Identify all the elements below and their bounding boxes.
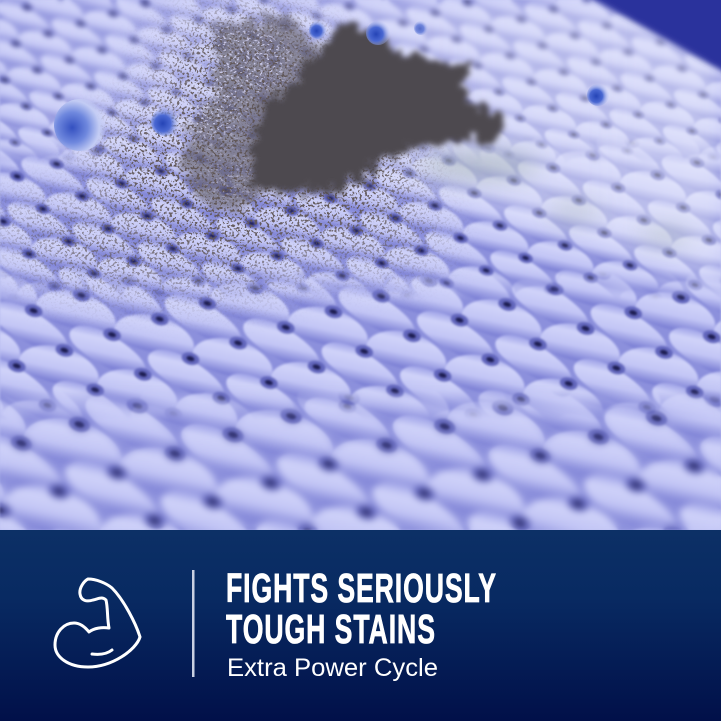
knit texture (0, 0, 721, 530)
droplet right (587, 84, 609, 106)
droplet top centre (366, 21, 390, 45)
stain and droplets overlay (0, 0, 721, 318)
subheading: Extra Power Cycle (227, 654, 438, 682)
droplet small left (151, 108, 179, 136)
divider (192, 570, 194, 677)
heading: FIGHTS SERIOUSLY (226, 566, 496, 611)
stain haze left and upper (182, 15, 350, 212)
droplet large left (54, 99, 106, 151)
panel: navy caption band (0, 530, 721, 721)
navy background corner (577, 0, 721, 76)
droplet top small (414, 21, 428, 35)
depth of field blur foreground (0, 380, 721, 530)
speckled soil particles (0, 0, 463, 318)
heading: TOUGH STAINS (226, 607, 435, 652)
faint green residue (420, 149, 691, 244)
panel: knitted fabric photo (0, 0, 721, 530)
depth of field blur background (0, 0, 718, 133)
dense stain blob (245, 22, 507, 192)
light fabric flecks through stain (154, 9, 308, 216)
icon: flexed bicep (55, 579, 140, 667)
top brightness wash (0, 0, 721, 280)
icon detail: forearm crease (92, 650, 112, 654)
droplet top (309, 21, 327, 39)
heading (226, 566, 496, 652)
